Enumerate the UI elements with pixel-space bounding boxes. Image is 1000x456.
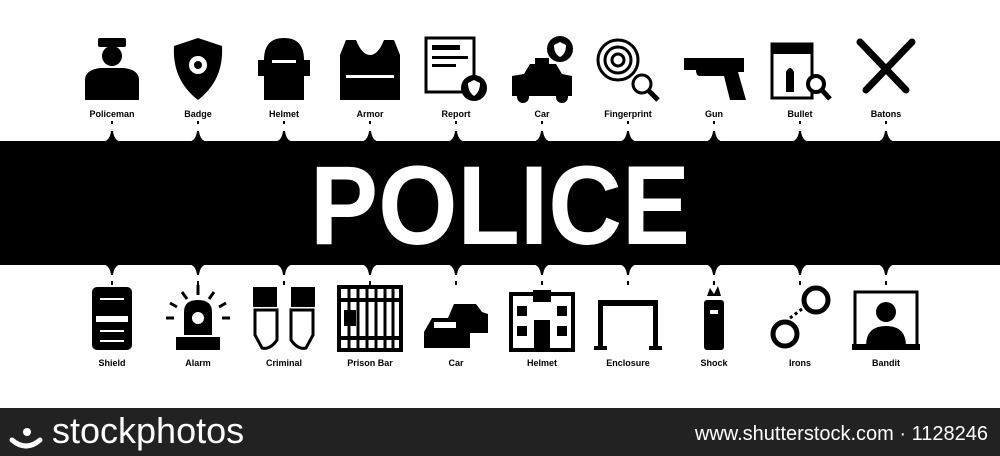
bottom labels [98,358,900,368]
icon: badge [174,38,222,100]
top labels: Bullet [787,109,813,119]
icon: irons [773,288,828,346]
icon: building [511,290,573,350]
top labels: Fingerprint [604,109,652,119]
bottom labels: Shock [700,358,728,368]
footer watermark bar: www.shutterstock.com · 1128246 [694,423,988,445]
icon: armor [340,40,400,100]
top labels: Report [442,109,471,119]
top labels: Armor [356,109,384,119]
bottom labels: Helmet [527,358,557,368]
icon: helmet [258,38,310,100]
footer watermark bar [0,408,1000,456]
bottom labels: Irons [789,358,811,368]
bottom labels: Criminal [266,358,302,368]
top labels: Badge [184,109,212,119]
bottom labels: Alarm [185,358,211,368]
icon: shock [704,286,724,350]
top labels: Policeman [89,109,135,119]
icon: bullet [772,44,830,99]
central band [0,121,1000,285]
icon: policeman [85,38,139,100]
icon: criminal [253,287,315,348]
top icons row [85,36,912,103]
bottom labels: Shield [98,358,126,368]
top labels: Car [534,109,550,119]
icon: fingerprint [598,40,658,100]
bottom labels: Bandit [872,358,900,368]
icon: car [512,36,573,103]
icon: report [426,38,487,101]
top labels: Gun [705,109,723,119]
icon: batons [860,42,912,90]
icon: prison bar [339,287,401,350]
bottom labels: Prison Bar [347,358,393,368]
title: POLICE [310,143,690,268]
footer watermark bar: stockphotos [52,410,244,451]
icon: alarm [166,285,230,350]
top labels [89,109,901,119]
icon: shield [92,287,132,350]
bottom labels: Car [448,358,464,368]
icon: gun [684,58,746,100]
bottom labels: Enclosure [606,358,650,368]
icon: car pair [424,304,488,348]
top labels: Helmet [269,109,299,119]
icon: enclosure [594,300,662,350]
bottom icons row [92,285,920,350]
top labels: Batons [871,109,901,119]
icon: bandit [852,292,920,350]
